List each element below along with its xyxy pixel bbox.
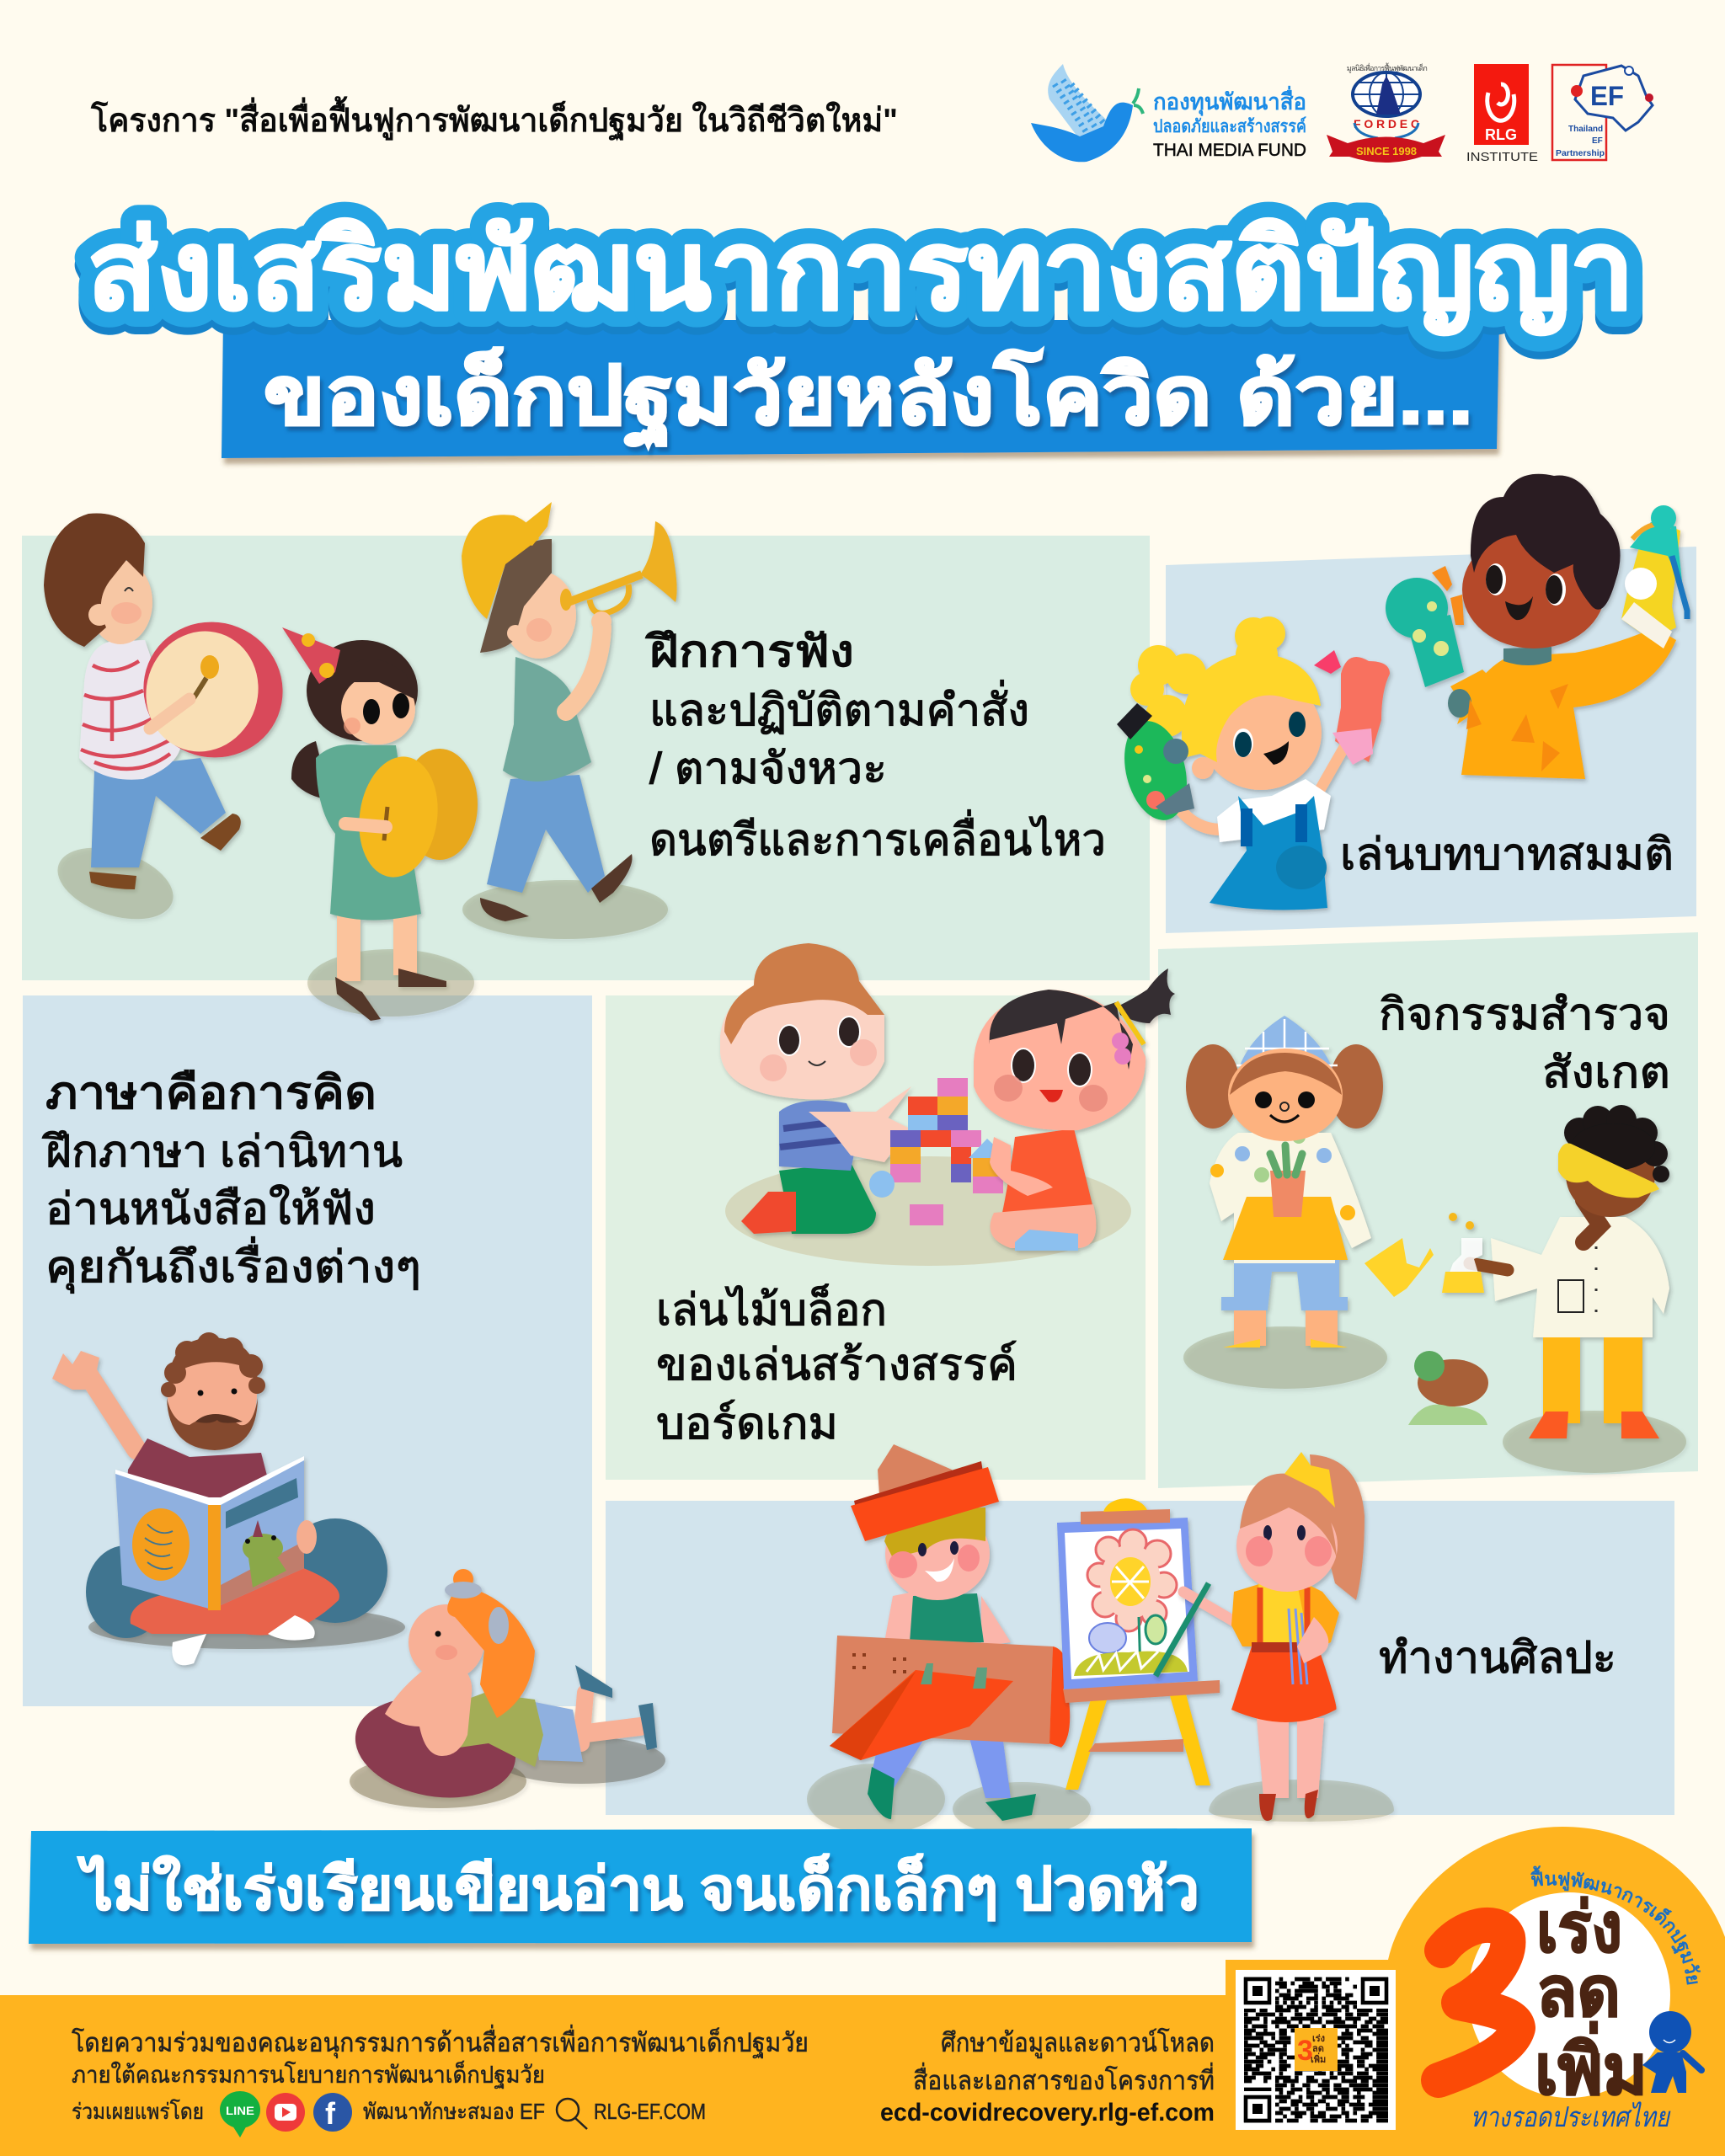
icon: YouTube	[266, 2093, 305, 2132]
banner	[29, 1828, 1252, 1944]
text: language: อ่านหนังสือให้ฟัง	[45, 1184, 376, 1234]
footer credits: โดยความร่วมของคณะอนุกรรมการด้านสื่อสารเพื่อการพัฒนาเด็กปฐมวัย	[72, 2025, 809, 2059]
QR centre logo	[1295, 2028, 1338, 2071]
logo: Thailand EF Partnership: Partnership	[1556, 149, 1605, 158]
text: exploration: สังเกต	[1542, 1049, 1670, 1097]
logo: RLG Institute	[1466, 64, 1538, 164]
footer credits: ภายใต้คณะกรรมการนโยบายการพัฒนาเด็กปฐมวัย	[72, 2060, 545, 2089]
character: painting girl	[1156, 1452, 1394, 1822]
logo: Thailand EF Partnership: Thailand	[1568, 125, 1603, 134]
icon: blue mascot	[1642, 2011, 1701, 2093]
logo: FORDEC: SINCE 1998	[1356, 145, 1417, 157]
text: listening: / ตามจังหวะ	[649, 744, 887, 793]
panel: listening and music	[22, 536, 1150, 980]
QR centre logo: เร่ง	[1312, 2034, 1325, 2044]
character: block girl	[974, 969, 1175, 1251]
panel: exploration	[1158, 932, 1698, 1488]
logo: Thai Media Fund: กองทุนพัฒนาสื่อ	[1153, 85, 1306, 116]
text: art: ทำงานศิลปะ	[1379, 1634, 1616, 1683]
campaign words	[1535, 1890, 1648, 2109]
character: block boy	[720, 943, 1131, 1266]
partner logos	[1031, 62, 1653, 164]
main title: ส่งเสริมพัฒนาการทางสติปัญญา	[88, 209, 1634, 336]
campaign words: เพิ่ม	[1535, 2021, 1648, 2109]
icon: LINE: LINE	[226, 2104, 254, 2117]
QR centre logo: เพิ่ม	[1311, 2052, 1326, 2065]
character: puppet girl	[1115, 616, 1390, 910]
logo: Thai Media Fund: ปลอดภัยและสร้างสรรค์	[1153, 116, 1306, 136]
text: listening: ฝึกการฟัง	[644, 627, 854, 676]
text: language	[42, 1068, 421, 1294]
logo: RLG Institute: RLG	[1485, 126, 1517, 143]
text: blocks	[656, 1284, 1017, 1449]
footer credits: RLG-EF.COM	[594, 2099, 706, 2124]
character: puppet boy	[1386, 474, 1687, 779]
text: language: ภาษาคือการคิด	[45, 1068, 377, 1118]
panel: language	[23, 995, 592, 1706]
panel: role play	[1166, 547, 1696, 933]
icon: mushroom	[1408, 1351, 1488, 1425]
main title: ส่งเสริมพัฒนาการทางสติปัญญา	[88, 209, 1634, 336]
download information: ecd-covidrecovery.rlg-ef.com	[880, 2099, 1215, 2127]
QR centre logo: 3	[1297, 2035, 1313, 2067]
logo: FORDEC: FORDEC	[1354, 117, 1419, 131]
QR code	[1236, 1970, 1396, 2130]
logo: Thailand EF Partnership: EF	[1592, 136, 1603, 146]
text: listening: ดนตรีและการเคลื่อนไหว	[649, 809, 1106, 865]
icon: magnifier	[557, 2099, 587, 2129]
footer credits: ร่วมเผยแพร่โดย	[72, 2099, 204, 2124]
logo: Thailand EF Partnership: EF	[1590, 81, 1624, 111]
icon: watering can	[1365, 1238, 1434, 1297]
character: airplane costume boy	[807, 1444, 1091, 1836]
text: blocks: ของเล่นสร้างสรรค์	[656, 1341, 1017, 1390]
icon: easel with flower painting	[1057, 1498, 1220, 1790]
subtitle text: ของเด็กปฐมวัยหลังโควิด ด้วย...	[264, 347, 1473, 449]
banner text: ไม่ใช่เร่งเรียนเขียนอ่าน จนเด็กเล็กๆ ปวดหัว	[77, 1853, 1199, 1922]
icon: Facebook: f	[325, 2096, 336, 2131]
icon: LINE	[220, 2091, 260, 2137]
character: girl lying on cushion	[347, 1569, 665, 1810]
character: reading father	[52, 1332, 405, 1665]
campaign logo	[1421, 1865, 1705, 2132]
project heading: โครงการ "สื่อเพื่อฟื้นฟูการพัฒนาเด็กปฐมวัย ในวิถีชีวิตใหม่"	[90, 96, 898, 141]
logo: FORDEC	[1327, 62, 1445, 163]
campaign tagline: ทางรอดประเทศไทย	[1471, 2101, 1671, 2132]
QR centre logo: ลด	[1312, 2044, 1324, 2054]
QR finder patterns	[1244, 1977, 1388, 2122]
text: role play: เล่นบทบาทสมมติ	[1340, 830, 1674, 879]
curved campaign slogan: ฟื้นฟูพัฒนาการเด็กปฐมวัย	[1530, 1865, 1701, 1985]
logo: FORDEC: มูลนิธิเพื่อการฟื้นฟูพัฒนาเด็ก	[1347, 62, 1428, 73]
character: scientist boy	[1442, 1105, 1686, 1473]
campaign words: เร่ง	[1536, 1890, 1622, 1967]
campaign numeral 3	[1439, 1925, 1518, 2080]
download information: ศึกษาข้อมูลและดาวน์โหลด	[941, 2028, 1215, 2058]
download information	[880, 2028, 1215, 2127]
footer credits	[72, 2025, 809, 2137]
text: listening	[644, 627, 1106, 865]
panel: art	[606, 1501, 1674, 1815]
character: trumpet boy	[462, 502, 677, 939]
character: gardener girl	[1183, 1016, 1387, 1389]
footer credits: พัฒนาทักษะสมอง EF	[363, 2099, 545, 2124]
text: listening: และปฏิบัติตามคำสั่ง	[649, 680, 1029, 735]
footer band	[0, 1827, 1725, 2156]
logo: Thai Media Fund: THAI MEDIA FUND	[1153, 141, 1306, 160]
icon: Facebook	[313, 2093, 352, 2132]
subtitle bar	[222, 320, 1499, 458]
main title: ส่งเสริมพัฒนาการทางสติปัญญา	[88, 216, 1634, 344]
text: exploration	[1379, 990, 1670, 1097]
character: cymbal girl	[282, 627, 478, 1021]
text: language: คุยกันถึงเรื่องต่างๆ	[45, 1236, 421, 1294]
text: language: ฝึกภาษา เล่านิทาน	[42, 1128, 403, 1177]
logo: RLG Institute: INSTITUTE	[1466, 150, 1538, 164]
text: blocks: เล่นไม้บล็อก	[656, 1284, 887, 1335]
panel: blocks	[606, 995, 1146, 1480]
icon: stacked toy blocks	[869, 1078, 1007, 1225]
text: exploration: กิจกรรมสำรวจ	[1379, 990, 1670, 1039]
logo: Thai Media Fund	[1031, 64, 1306, 162]
character: drum boy	[44, 513, 303, 932]
download information: สื่อและเอกสารของโครงการที่	[913, 2063, 1215, 2095]
text: blocks: บอร์ดเกม	[656, 1400, 838, 1449]
campaign words: ลด	[1536, 1954, 1621, 2031]
logo: Thailand EF Partnership	[1552, 65, 1653, 160]
